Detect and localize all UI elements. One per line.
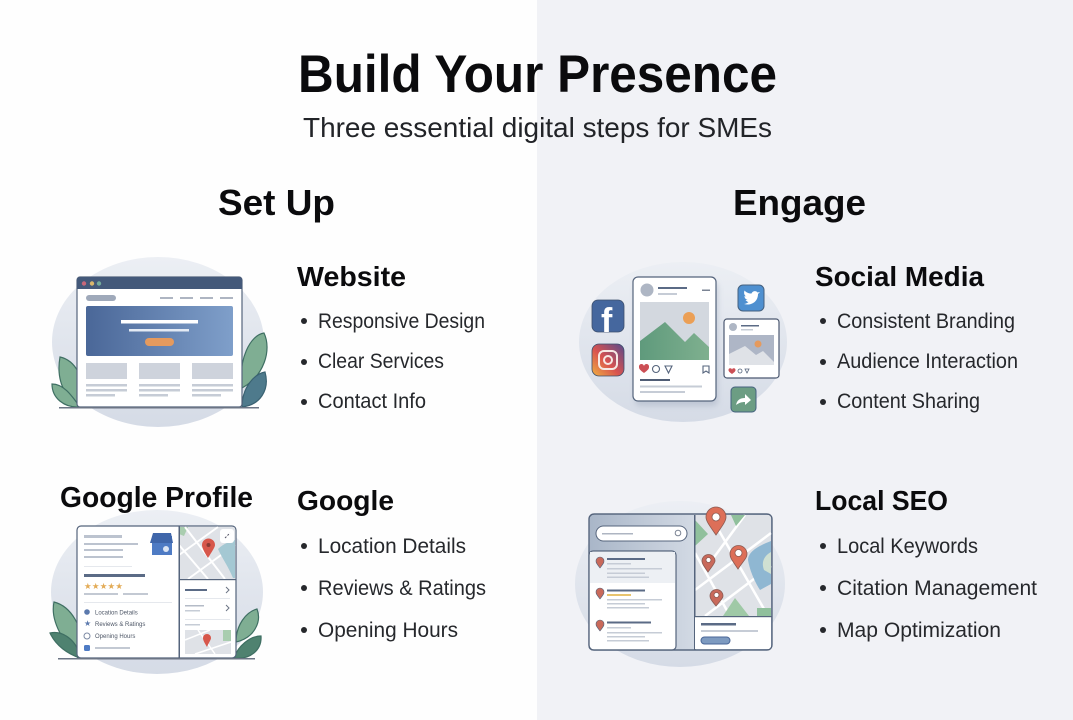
illustration: website browser: [52, 257, 267, 427]
text block: Google: Google: [297, 485, 394, 516]
illustration: Google Profile: [50, 482, 263, 674]
profile card: ★: [84, 619, 91, 628]
icon: facebook: [592, 300, 624, 340]
map panel: [179, 527, 235, 579]
title: Build Your Presence: [298, 45, 777, 104]
profile card: Location Details: [95, 610, 138, 616]
icon: facebook: f: [601, 302, 613, 340]
browser window: [77, 277, 242, 407]
profile card: Opening Hours: [95, 634, 135, 640]
text block: Local SEO: Citation Management: [837, 577, 1037, 600]
icon: stars: ★★★★★: [84, 582, 123, 592]
label: Google Profile: Google Profile: [60, 482, 253, 514]
text block: Social Media: Audience Interaction: [837, 350, 1018, 373]
text block: Social Media: Consistent Branding: [837, 310, 1015, 333]
text block: Website: Responsive Design: [318, 310, 485, 333]
text block: Social Media: Content Sharing: [837, 390, 980, 413]
text block: Local SEO: [815, 485, 1037, 642]
icon: left plant: [52, 357, 84, 407]
text block: Social Media: [815, 261, 1018, 413]
text block: Social Media: Social Media: [815, 261, 984, 292]
icon: twitter: [738, 285, 764, 311]
map panel: [695, 515, 771, 616]
text block: Google: Opening Hours: [318, 619, 458, 642]
icon: instagram: [592, 344, 624, 376]
text block: Google: Location Details: [318, 535, 466, 558]
phone post card: [633, 277, 718, 406]
text block: Website: Clear Services: [318, 350, 444, 373]
illustration: local SEO: [575, 501, 785, 667]
text block: Local SEO: Local SEO: [815, 485, 948, 516]
icon: red map pin: [202, 538, 215, 558]
icon: store: [150, 533, 173, 555]
icon: left plant: [50, 602, 84, 658]
text block: Local SEO: Map Optimization: [837, 619, 1001, 642]
icon: map pins: [702, 507, 747, 606]
heading: Engage: Engage: [733, 182, 866, 223]
background: right panel: [537, 0, 1073, 720]
mini map: [185, 630, 231, 654]
profile card: [77, 526, 236, 658]
illustration: social media: [579, 262, 787, 422]
icon: share: [731, 387, 756, 412]
text block: Website: [297, 261, 485, 413]
text block: Google: [297, 485, 486, 642]
search app frame: [589, 514, 772, 650]
text block: Google: Reviews & Ratings: [318, 577, 486, 600]
small post card: [724, 319, 779, 378]
icon: heart: [639, 364, 649, 373]
profile card: Reviews & Ratings: [95, 622, 145, 628]
icon: right plant: [241, 333, 267, 407]
subtitle: Three essential digital steps for SMEs: [303, 112, 772, 143]
map footer: [695, 616, 772, 649]
search bar: [596, 526, 687, 541]
icon: right plant: [234, 609, 261, 658]
text block: Local SEO: Local Keywords: [837, 535, 978, 558]
heading: Set Up: Set Up: [218, 182, 335, 223]
background: left panel: [0, 0, 537, 720]
text block: Website: Contact Info: [318, 390, 426, 413]
results list: [589, 551, 676, 650]
text block: Website: Website: [297, 261, 406, 292]
